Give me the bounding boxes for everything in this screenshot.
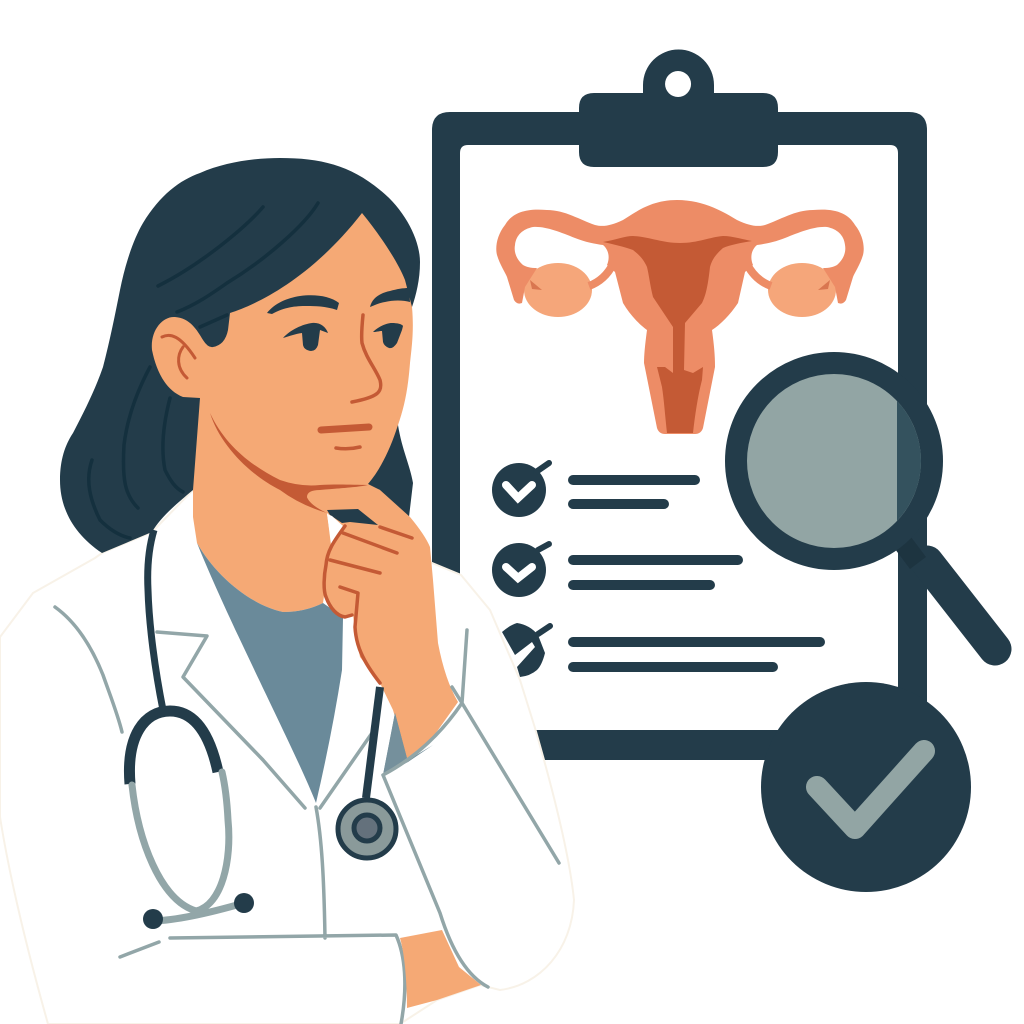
chest piece: [338, 800, 396, 858]
ear detail: [162, 335, 195, 378]
wrist: [400, 930, 481, 1008]
ligaments: [589, 264, 771, 286]
coat lines: [55, 607, 559, 1024]
uterine cavity: [603, 236, 752, 433]
approval badge: [761, 682, 971, 892]
nose: [352, 315, 381, 402]
fallopian tubes and uterus body: [496, 200, 864, 434]
hair: [60, 158, 420, 553]
jaw shadow: [210, 413, 368, 513]
checklist: [492, 463, 825, 677]
stethoscope earpieces: [143, 909, 163, 929]
eyes: [283, 323, 328, 351]
ovaries: [524, 263, 592, 317]
coat: [0, 490, 574, 1024]
uterus diagram: [496, 200, 864, 434]
check item 3: [502, 623, 825, 677]
gap under index finger: [327, 509, 378, 525]
hair strands: [89, 203, 318, 538]
clipboard: [432, 50, 927, 760]
mouth: [321, 427, 369, 430]
doctor: [0, 158, 574, 1024]
finger lines: [324, 526, 412, 683]
check item 2: [492, 543, 743, 597]
stethoscope: [129, 530, 396, 929]
face and neck: [152, 213, 413, 612]
clipboard clip: [579, 50, 778, 167]
check item 1: [492, 463, 700, 517]
inner shirt: [197, 543, 343, 803]
eyebrows: [267, 295, 339, 314]
sleeve shirt piece: [383, 713, 433, 775]
magnifying glass: [736, 363, 995, 649]
hand and forearm: [307, 485, 458, 762]
